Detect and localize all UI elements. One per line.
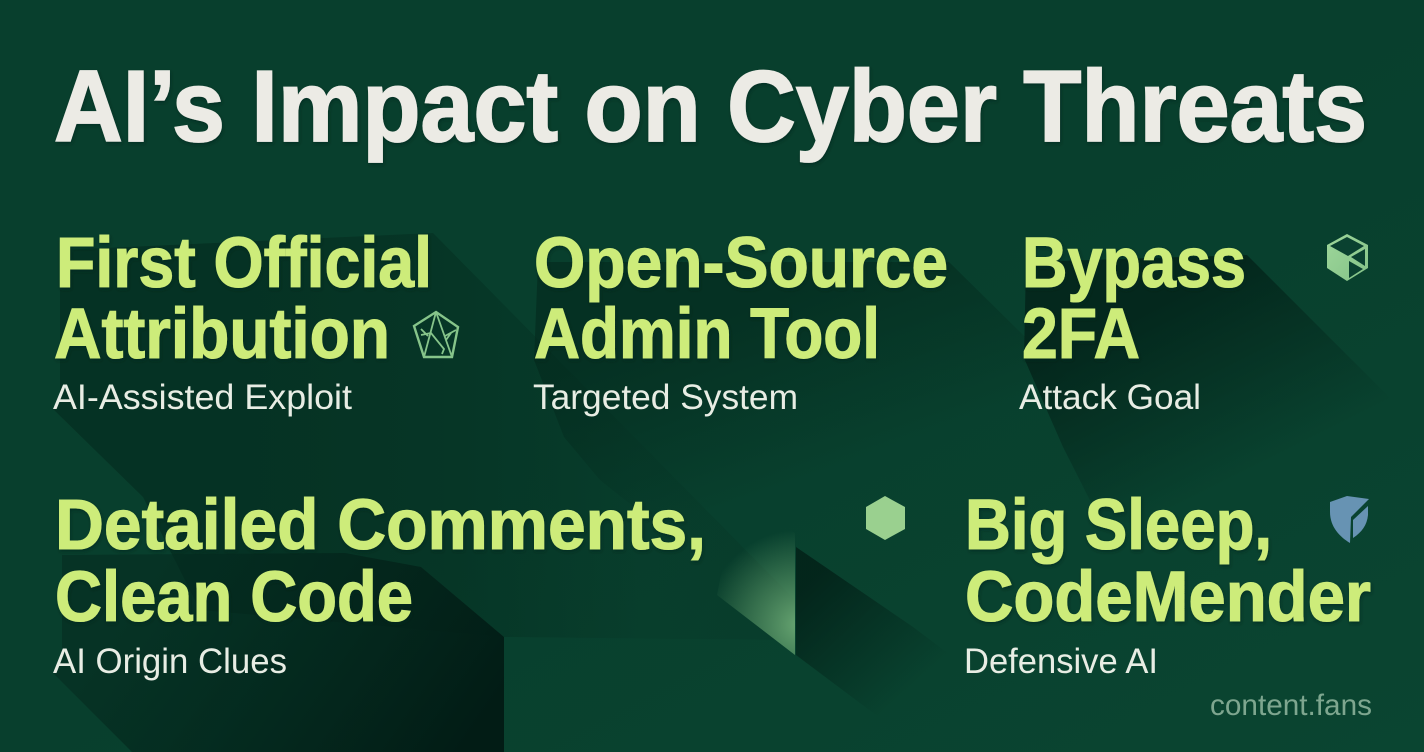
heading	[534, 224, 948, 374]
subtitle: AI Origin Clues	[53, 642, 287, 681]
heading: Clean Code	[55, 558, 413, 637]
heading: Admin Tool	[534, 295, 880, 374]
subtitle: Targeted System	[533, 378, 798, 417]
subtitle: AI-Assisted Exploit	[53, 378, 352, 417]
long diagonal shadows	[53, 233, 1420, 752]
heading: Open-Source	[534, 224, 948, 303]
subtitle: Attack Goal	[1019, 378, 1201, 417]
subtitle: Defensive AI	[964, 642, 1158, 681]
item: First Official Attribution	[53, 224, 458, 417]
icon: cube	[1327, 234, 1368, 281]
heading: First Official	[56, 224, 432, 303]
heading: Big Sleep,	[965, 486, 1272, 565]
title: AI’s Impact on Cyber Threats	[54, 51, 1367, 163]
heading: Attribution	[54, 295, 390, 374]
heading	[1022, 224, 1246, 374]
icon: shield	[1330, 496, 1369, 543]
icon: pentagon	[414, 312, 458, 357]
item: Open-Source Admin Tool	[533, 224, 948, 417]
watermark: content.fans	[1210, 689, 1372, 722]
heading	[965, 486, 1371, 637]
item: Detailed Comments, Clean Code	[53, 486, 905, 681]
item: Big Sleep, CodeMender	[964, 486, 1371, 681]
item: Bypass 2FA	[1019, 224, 1368, 417]
icon: hexagon	[866, 496, 905, 540]
heading	[54, 224, 432, 374]
heading: Bypass	[1022, 224, 1246, 303]
heading: CodeMender	[965, 558, 1371, 637]
glowing facet	[717, 500, 795, 655]
heading: Detailed Comments,	[55, 486, 706, 565]
heading: 2FA	[1022, 295, 1140, 374]
heading	[55, 486, 706, 637]
